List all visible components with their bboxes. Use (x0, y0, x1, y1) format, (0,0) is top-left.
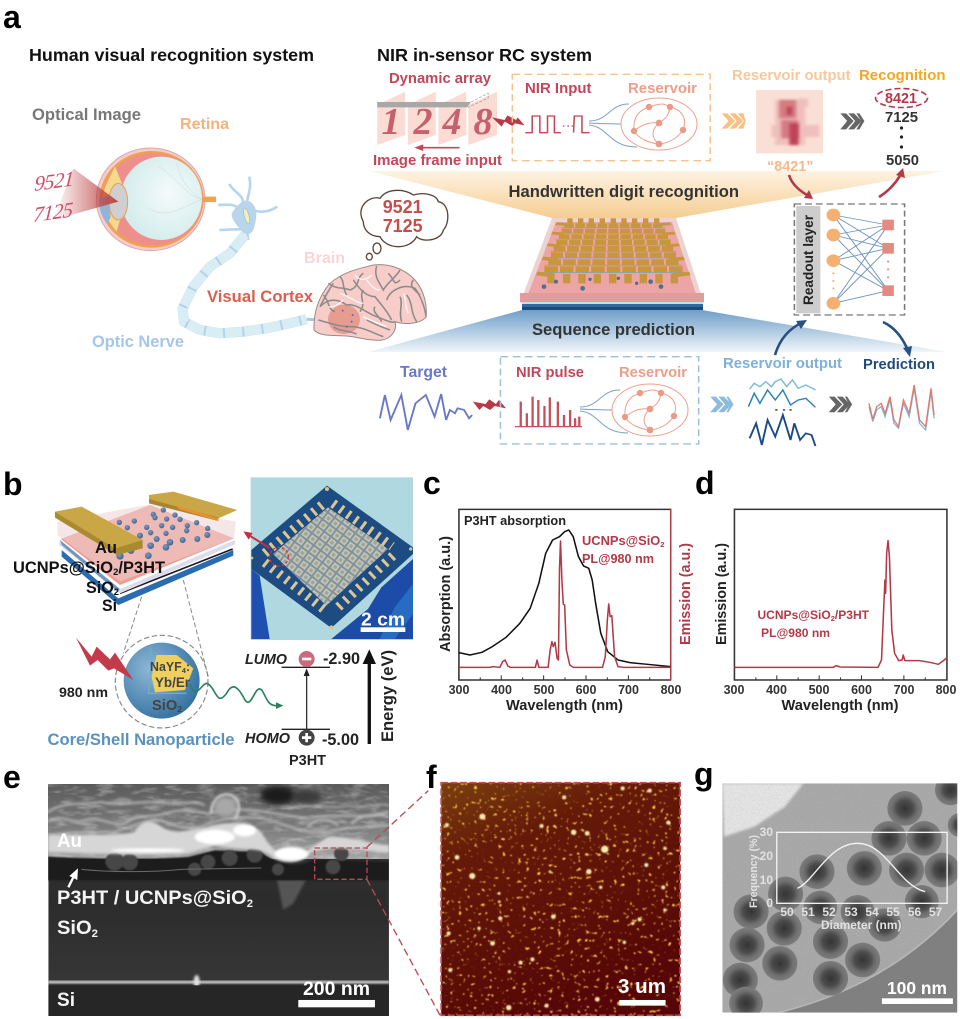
stack labels: Si (102, 597, 117, 615)
panel label d: d (695, 465, 715, 501)
chart c text: 700 (618, 683, 639, 697)
label: visual cortex: Visual Cortex (207, 287, 314, 306)
chart c text: Emission (a.u.) (678, 543, 694, 645)
chart c text: 600 (576, 683, 596, 697)
inset axis labels: 56 (908, 905, 921, 919)
icon: neuron (218, 177, 277, 240)
energy level diagram: LUMO (245, 652, 287, 668)
SEM labels: Au (57, 831, 82, 852)
inset axis labels: 0 (766, 896, 773, 910)
SEM labels: Si (57, 990, 75, 1011)
chevrons orange (722, 113, 746, 129)
SEM labels: 2 (92, 928, 98, 940)
handwritten digits 9521 7125 (33, 166, 75, 227)
chart d text: /P3HT (835, 608, 870, 622)
label: reservoir top: Reservoir (628, 80, 697, 97)
chart: emission (734, 509, 947, 680)
chevrons gray top (840, 113, 864, 129)
SEM labels: P3HT / UCNPs@SiO (57, 887, 242, 909)
chart d text: 300 (724, 683, 744, 697)
label: handwritten digit recognition: Handwritten digit recognition (508, 182, 739, 201)
panel c (423, 465, 694, 714)
cloud digits: 7125 (383, 216, 423, 236)
inset axis labels: 55 (886, 905, 900, 919)
stack labels (13, 539, 165, 615)
handwritten frame digits: 1 (382, 101, 400, 143)
nanoparticle labels: SiO (152, 698, 177, 714)
chart c text: PL@980 nm (582, 552, 654, 566)
chart c text: P3HT absorption (464, 514, 566, 528)
device stack illustration (55, 492, 237, 605)
output nodes (882, 220, 894, 296)
chart c text: 800 (661, 683, 681, 697)
handwritten frame digits: 2 (412, 101, 432, 143)
pulse bars (521, 397, 579, 427)
chart c text: Wavelength (nm) (506, 698, 623, 714)
icon: NIR bolt top (492, 115, 525, 127)
handwritten frame digits: 4 (442, 101, 462, 143)
cloud digits: 9521 (383, 197, 423, 217)
zoom lines to panel f (367, 791, 442, 1018)
chart c text: 500 (534, 683, 554, 697)
digit frames: dynamic array (377, 92, 497, 151)
stack labels: Au (95, 539, 117, 557)
chevrons gray bottom (829, 397, 852, 412)
recognition list: 8421 (885, 91, 917, 107)
icon: 980 nm excitation bolt (76, 638, 133, 680)
chart: reservoir output traces (748, 379, 815, 446)
inset axis labels: Frequency (%) (748, 835, 760, 908)
chart: absorption and emission (459, 509, 671, 681)
SEM labels (57, 831, 370, 1011)
chart: prediction traces (869, 385, 934, 430)
chart c text (438, 514, 694, 714)
scale label 100 nm: 100 nm (887, 978, 947, 998)
reservoir network top (589, 98, 697, 150)
chart d text: 600 (851, 683, 872, 697)
nanoparticle labels: 4 (182, 666, 187, 675)
handwritten digits 9521 7125: 7125 (33, 197, 74, 227)
icon: brain (314, 265, 426, 340)
panel label g: g (694, 756, 714, 792)
recognition list (876, 88, 928, 169)
arrow: white pointer (68, 868, 78, 887)
label: core shell nanoparticle: Core/Shell Nanoparticle (48, 730, 234, 749)
label: brain: Brain (304, 250, 345, 267)
stack labels: 2 (114, 587, 119, 598)
SEM labels: SiO (57, 917, 91, 939)
recognition list: 7125 (885, 110, 918, 126)
panel label f: f (426, 759, 437, 795)
panel label c: c (423, 465, 441, 501)
heading: NIR in-sensor RC system: NIR in-sensor RC system (377, 45, 592, 65)
box: NIR input and reservoir (512, 74, 710, 161)
chart d text: 700 (894, 683, 914, 697)
chart d text: 800 (936, 683, 956, 697)
stack labels: SiO (86, 579, 114, 597)
label: reservoir output bottom: Reservoir output (723, 356, 842, 372)
stack labels: UCNPs@SiO (13, 559, 113, 577)
icon: thought cloud (361, 190, 448, 260)
energy level diagram: -5.00 (322, 731, 359, 749)
inset axis labels: 10 (760, 873, 773, 887)
nanoparticle (115, 580, 208, 728)
label: NIR input: NIR Input (525, 80, 592, 97)
label: readout layer: Readout layer (801, 214, 816, 305)
handwritten frame digits (382, 101, 492, 143)
nanoparticle labels: Yb/Er (155, 675, 191, 690)
handwritten frame digits: 8 (474, 101, 492, 143)
chart d text: Wavelength (nm) (782, 698, 899, 714)
heading: human visual recognition: Human visual recognition system (29, 45, 314, 65)
box: NIR pulse and reservoir (500, 357, 699, 444)
chart: target wave (380, 394, 472, 430)
label: NIR pulse: NIR pulse (516, 365, 584, 381)
panel label e: e (3, 759, 21, 795)
band: sequence prediction (368, 310, 947, 352)
inset axis labels (748, 825, 942, 932)
chart c text: 300 (449, 683, 469, 697)
label: optic nerve: Optic Nerve (92, 333, 184, 351)
inset axis labels: 50 (780, 905, 794, 919)
panel label b: b (3, 466, 23, 502)
reservoir network bottom (580, 384, 688, 436)
chart c text: 400 (491, 683, 512, 697)
arrows: blue to and from readout (775, 320, 912, 357)
energy level diagram: HOMO (245, 731, 291, 747)
chart d text: UCNPs@SiO (758, 608, 831, 622)
stack labels: /P3HT (118, 559, 165, 577)
label: sequence prediction: Sequence prediction (532, 320, 695, 339)
energy level diagram (245, 649, 397, 769)
inset axis labels: 51 (801, 905, 815, 919)
inset axis labels: 57 (929, 905, 942, 919)
nanoparticle labels: : (186, 660, 190, 674)
energy level diagram: Energy (eV) (378, 650, 397, 742)
SEM cross-section image (48, 784, 389, 1016)
band: handwritten digit recognition (370, 171, 945, 218)
size distribution curve (797, 843, 925, 892)
scale label 3 um: 3 um (618, 975, 666, 998)
panel f (426, 759, 680, 1016)
SEM labels: 2 (247, 898, 253, 910)
device: crossbar chip (520, 218, 704, 310)
chart d text: Emission (a.u.) (714, 543, 730, 645)
panel g (694, 756, 960, 1019)
cloud digits (383, 197, 423, 236)
energy level diagram: -2.90 (323, 650, 360, 668)
stack labels: 2 (113, 567, 118, 578)
image: reservoir output 8 (756, 90, 823, 153)
TEM image (722, 775, 960, 1019)
chart c text: 2 (660, 540, 664, 549)
readout layer (794, 204, 905, 315)
handwritten digits 9521 7125: 9521 (34, 166, 75, 196)
chart d text: 500 (809, 683, 829, 697)
label: reservoir output top: Reservoir output (732, 68, 851, 84)
nanoparticle labels: NaYF (150, 660, 182, 674)
nanoparticle labels: 2 (177, 704, 182, 714)
label: recognition: Recognition (859, 67, 946, 84)
label: 980 nm: 980 nm (59, 685, 108, 701)
icon: eye (53, 148, 216, 251)
label: dynamic array: Dynamic array (389, 71, 492, 87)
chart d text: 400 (766, 683, 787, 697)
chart c text: UCNPs@SiO (582, 533, 660, 548)
panel e (3, 759, 442, 1018)
scale label 2 cm: 2 cm (361, 610, 405, 630)
label: quoted 8421: “8421” (767, 159, 814, 175)
icon: NIR bolt bottom (473, 399, 506, 410)
AFM image (441, 783, 680, 1016)
chart d text (714, 543, 956, 714)
chart c text: Absorption (a.u.) (438, 536, 454, 652)
energy level diagram: P3HT (289, 753, 326, 769)
panel d (695, 465, 956, 714)
label: prediction: Prediction (863, 357, 935, 373)
label: optical image: Optical Image (32, 105, 141, 124)
icon: optic nerve (183, 235, 353, 333)
label: target: Target (400, 364, 447, 381)
panel b (3, 466, 413, 769)
chart d text: PL@980 nm (761, 626, 830, 640)
inset axis labels: 52 (822, 905, 836, 919)
inset axis labels: 30 (760, 825, 773, 839)
label: reservoir bottom: Reservoir (619, 365, 687, 381)
chart d text: 2 (831, 614, 835, 623)
inset axis labels: 20 (760, 849, 773, 863)
recognition list: 5050 (886, 153, 919, 169)
chevrons blue (710, 397, 734, 412)
inset axis labels: 54 (865, 905, 879, 919)
photo: fabricated chip (243, 477, 413, 640)
pulse train (525, 116, 561, 133)
inset axis labels: Diameter (nm) (821, 918, 902, 932)
panel a (3, 0, 947, 446)
inset axis labels: 53 (844, 905, 858, 919)
SEM labels: 200 nm (303, 978, 370, 1000)
panel label a: a (3, 0, 21, 35)
arrow: green emission wave (190, 684, 283, 709)
label: image frame input: Image frame input (373, 152, 502, 169)
label: retina: Retina (180, 116, 229, 133)
nanoparticle labels (150, 660, 191, 714)
input nodes (827, 209, 840, 310)
arrows: red to and from readout (789, 168, 905, 199)
network connections (833, 215, 888, 303)
